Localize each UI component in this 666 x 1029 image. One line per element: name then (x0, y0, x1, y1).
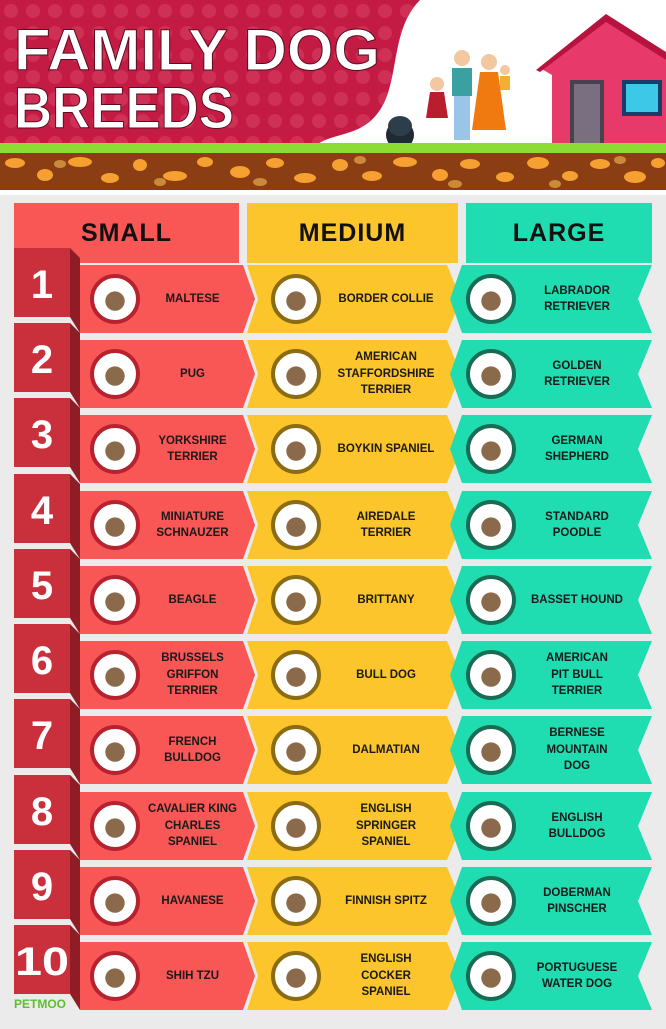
row 4: AIREDALE (357, 510, 415, 522)
dog cartoon (386, 116, 414, 149)
row 2: STAFFORDSHIRE (338, 368, 434, 380)
row 8: BULLDOG (549, 828, 605, 840)
row 2 (80, 340, 652, 408)
title (14, 18, 380, 141)
row 9 (80, 867, 652, 935)
heading: small: SMALL (81, 218, 172, 246)
row 10: SHIH TZU (166, 970, 219, 982)
row 3 (80, 415, 652, 483)
row 6: BULL DOG (356, 669, 416, 681)
rank numbers column: 3 (31, 413, 53, 457)
row 8 (80, 792, 652, 860)
row 5: BEAGLE (169, 594, 216, 606)
row 3: TERRIER (167, 451, 218, 463)
row 1 (80, 265, 652, 333)
row 2: AMERICAN (355, 351, 417, 363)
row 2: RETRIEVER (544, 376, 610, 388)
row 4: SCHNAUZER (156, 527, 229, 539)
row 2: TERRIER (361, 384, 411, 396)
rank numbers column: 4 (31, 489, 54, 533)
heading: small (14, 203, 239, 263)
row 6 (80, 641, 652, 709)
heading: large (466, 203, 652, 263)
row 3: YORKSHIRE (158, 434, 227, 446)
heading: medium (247, 203, 458, 263)
row 10: WATER DOG (542, 978, 612, 990)
rank numbers column: 1 (31, 263, 53, 307)
rank numbers column: 10 (15, 940, 69, 984)
row 5: BRITTANY (357, 594, 415, 606)
row 7: BULLDOG (164, 752, 221, 764)
title: BREEDS (14, 76, 234, 141)
row 3: GERMAN (551, 434, 603, 446)
row 1: MALTESE (165, 293, 220, 305)
title: FAMILY DOG (14, 18, 380, 83)
row 6: BRUSSELS (161, 652, 224, 664)
row 7 (80, 716, 652, 784)
row 8: SPANIEL (168, 836, 217, 848)
rank numbers column: 2 (31, 338, 53, 382)
row 1: RETRIEVER (544, 301, 610, 313)
row 7: DALMATIAN (352, 744, 420, 756)
row 7: BERNESE (549, 727, 605, 739)
rank numbers column (14, 248, 80, 1011)
row 4 (80, 491, 652, 559)
row 4: STANDARD (545, 510, 609, 522)
row 4: POODLE (553, 527, 601, 539)
row 6: AMERICAN (546, 652, 608, 664)
row 3: BOYKIN SPANIEL (338, 443, 434, 455)
row 2: PUG (180, 368, 205, 380)
row 7: MOUNTAIN (546, 744, 608, 756)
row 8: ENGLISH (551, 812, 603, 824)
row 1: BORDER COLLIE (338, 293, 434, 305)
row 9: DOBERMAN (543, 886, 611, 898)
row 10 (80, 942, 652, 1010)
row 5: BASSET HOUND (531, 594, 623, 606)
row 9: PINSCHER (547, 903, 607, 915)
rank numbers column: 7 (31, 714, 53, 758)
rank numbers column: 9 (31, 865, 53, 909)
row 7: DOG (564, 760, 590, 772)
header banner (0, 0, 666, 195)
row 8: CHARLES (165, 820, 220, 832)
logo: PETMOO (14, 997, 66, 1011)
row 8: CAVALIER KING (148, 803, 237, 815)
row 3: SHEPHERD (545, 451, 609, 463)
row 6: GRIFFON (167, 669, 218, 681)
heading: large: LARGE (513, 218, 605, 246)
row 2: GOLDEN (552, 360, 602, 372)
row 10: PORTUGUESE (537, 962, 617, 974)
family (426, 50, 510, 140)
row 5 (80, 566, 652, 634)
row 9: FINNISH SPITZ (345, 895, 427, 907)
row 8: SPRINGER (356, 820, 416, 832)
grass and soil (0, 143, 666, 153)
rank numbers column: 6 (31, 639, 53, 683)
row 8: ENGLISH (360, 803, 412, 815)
row 4: MINIATURE (161, 510, 224, 522)
row 6: TERRIER (167, 685, 218, 697)
row 6: TERRIER (552, 685, 602, 697)
rank numbers column: 5 (31, 564, 53, 608)
row 4: TERRIER (361, 527, 411, 539)
row 10: COCKER (361, 970, 411, 982)
row 6: PIT BULL (551, 669, 603, 681)
row 7: FRENCH (169, 736, 216, 748)
row 1: LABRADOR (544, 284, 610, 296)
row 10: SPANIEL (362, 986, 410, 998)
row 8: SPANIEL (361, 836, 410, 848)
heading: medium: MEDIUM (299, 218, 406, 246)
row 10: ENGLISH (360, 953, 412, 965)
row 9: HAVANESE (161, 895, 224, 907)
rank numbers column: 8 (31, 790, 53, 834)
house (536, 14, 666, 148)
